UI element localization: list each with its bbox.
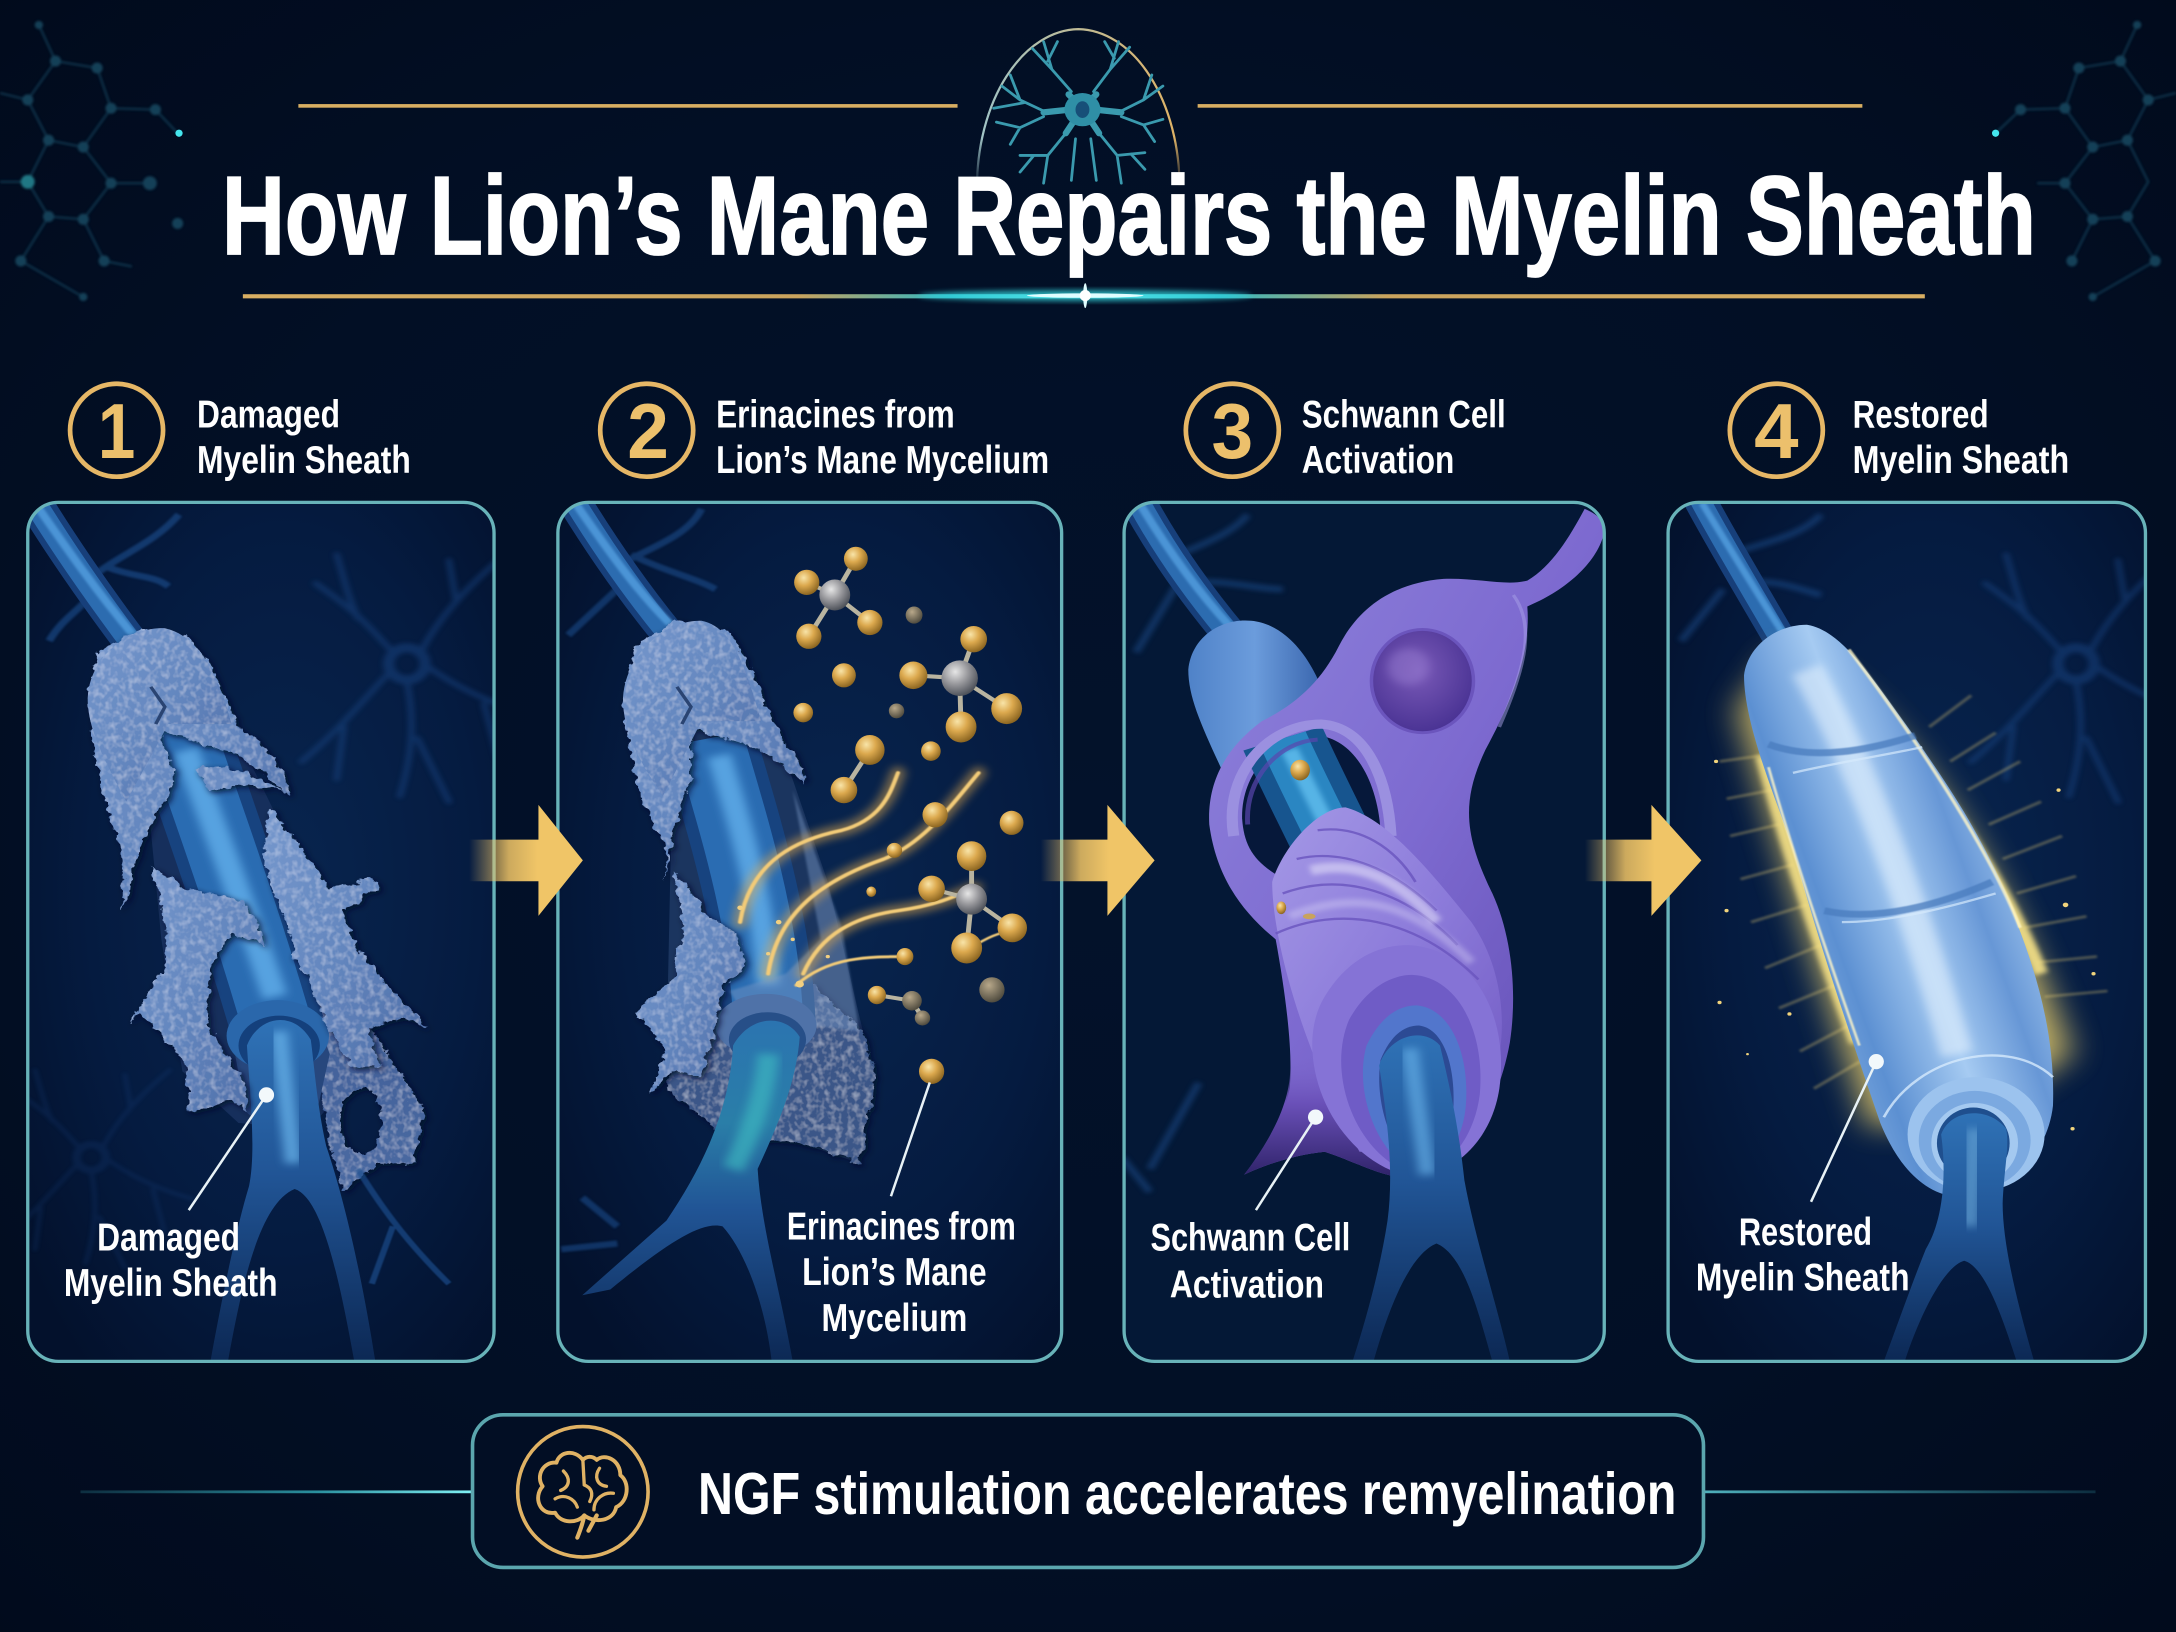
label: Myelin Sheath: [1696, 1257, 1910, 1300]
arrow 1: [469, 805, 583, 916]
opening showing the axon: [1242, 736, 1381, 882]
axon lower: [582, 1021, 800, 1361]
glowing node left: [175, 130, 183, 137]
collar: [716, 994, 816, 1048]
torn flaps: [88, 628, 428, 1112]
step 2 heading: Lion’s Mane Mycelium: [716, 439, 1049, 482]
icon: neuron in arc: [977, 29, 1180, 187]
highlight: [1807, 670, 1957, 1054]
arrow 3: [1585, 805, 1701, 916]
step 3 heading: 3: [1212, 389, 1253, 475]
leader: restored sheath: [1811, 1054, 1884, 1202]
concentric wraps around axon: [1312, 945, 1501, 1178]
nucleus: [1371, 629, 1473, 733]
decorative molecular network right: [1996, 21, 2176, 301]
blue sheath dome: [1188, 620, 1321, 802]
step 3 heading: [1186, 384, 1506, 482]
smooth sheath dome: [88, 628, 231, 802]
leader: damaged sheath: [189, 1087, 274, 1210]
callout: NGF: [473, 1415, 1703, 1567]
smooth sheath dome: [623, 621, 761, 796]
dark membrane: [666, 727, 863, 1163]
collar: [227, 1000, 329, 1071]
exposed axon: [179, 727, 277, 1025]
label: Mycelium: [822, 1297, 967, 1340]
top gold divider right: [1198, 104, 1862, 108]
label: [1150, 1216, 1350, 1307]
label: Activation: [1170, 1264, 1324, 1307]
lower membrane with ring: [316, 991, 424, 1192]
panel 2: erinacines: [558, 497, 1062, 1361]
label: [1696, 1211, 1910, 1300]
bottom connector right: [1704, 1490, 2096, 1493]
axon top: [572, 497, 670, 632]
step 1 heading: 1: [98, 389, 135, 475]
step 1 heading: [70, 384, 411, 482]
decorative molecular network left: [0, 21, 183, 301]
step 4 heading: 4: [1754, 389, 1799, 475]
segment boundaries: [1768, 736, 2053, 1117]
golden glow: [1737, 652, 2073, 1129]
label: [64, 1216, 278, 1305]
title underline with glow: [243, 283, 1925, 308]
leader: erinacines: [891, 1082, 930, 1196]
sparkles: [1714, 760, 2096, 1130]
step 3 heading: Schwann Cell: [1302, 393, 1506, 436]
axon fork: [1884, 1113, 2034, 1361]
label: [787, 1205, 1016, 1340]
step 1 heading: Damaged: [197, 393, 340, 436]
step 3 heading: Activation: [1302, 439, 1454, 482]
axon lower: [1353, 1035, 1510, 1361]
callout text: NGF stimulation accelerates remyelination: [698, 1460, 1676, 1527]
translucent sheath region: [730, 790, 859, 1031]
dark crevice behind the tear: [151, 754, 324, 1124]
molecules: [814, 568, 1002, 1014]
exposed axon: [709, 738, 768, 1023]
torn flaps: [623, 621, 805, 1094]
axon top: [32, 497, 133, 641]
top gold divider left: [298, 104, 958, 108]
step 4 heading: Myelin Sheath: [1853, 439, 2069, 482]
label: Lion’s Mane: [802, 1251, 987, 1294]
wrapping band: [1272, 807, 1502, 1152]
step 4 heading: [1730, 384, 2069, 482]
label: Erinacines from: [787, 1205, 1016, 1248]
leader: schwann cell: [1256, 1110, 1323, 1210]
gold specks: [1290, 760, 1310, 780]
step 2 heading: Erinacines from: [716, 393, 955, 436]
step 2 heading: [600, 384, 1049, 482]
panel 1: damaged myelin sheath: [26, 500, 496, 1363]
label: Myelin Sheath: [64, 1262, 278, 1305]
bright rim: [1849, 649, 2020, 928]
schwann cell body: [1209, 509, 1604, 1178]
label: Damaged: [97, 1216, 240, 1259]
gold streams: [740, 773, 979, 974]
axon top: [1699, 497, 1782, 644]
light rays: [1720, 695, 2107, 1089]
myelin capsule: [1744, 625, 2053, 1198]
panel 4: restored myelin sheath: [1668, 497, 2176, 1361]
end rings: [1908, 1077, 2045, 1192]
step 1 heading: Myelin Sheath: [197, 439, 411, 482]
step 4 heading: Restored: [1853, 393, 1989, 436]
glowing node right: [1992, 130, 1999, 137]
axon fork: [210, 1020, 375, 1361]
arrow 2: [1041, 805, 1155, 916]
label: Restored: [1739, 1211, 1872, 1254]
step 2 heading: 2: [627, 389, 669, 475]
axon top: [1136, 497, 1230, 635]
label: Schwann Cell: [1150, 1216, 1350, 1259]
bottom connector left: [80, 1490, 472, 1493]
panel 3: schwann cell activation: [1122, 497, 1604, 1361]
icon: brain: [518, 1427, 648, 1557]
